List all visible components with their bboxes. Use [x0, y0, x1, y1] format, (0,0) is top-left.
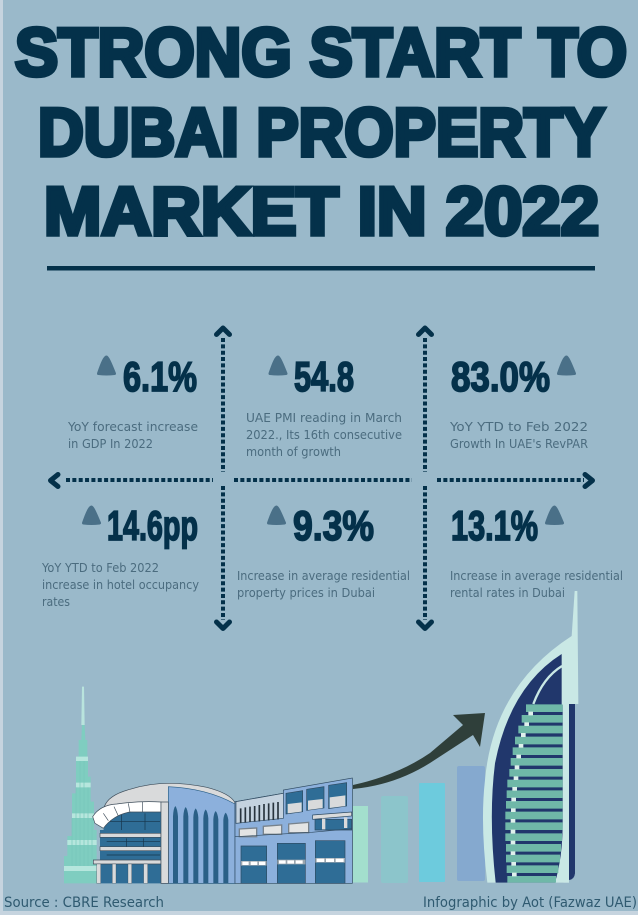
icon: Burj Al Arab — [483, 591, 578, 883]
icon: office building — [235, 778, 352, 883]
icon: up triangle — [558, 357, 574, 374]
icon: mall building — [93, 783, 235, 883]
stat: rental rates: 13.1% — [451, 502, 538, 549]
title: MARKET IN 2022 — [44, 174, 599, 250]
stat: PMI: 2022., Its 16th consecutive — [246, 427, 402, 442]
icon: up triangle — [98, 357, 114, 374]
stat: GDP: in GDP In 2022 — [68, 436, 153, 451]
divider arrows — [50, 328, 592, 628]
icon: up triangle — [546, 507, 562, 524]
icon: Burj Khalifa — [64, 687, 97, 883]
stat: GDP: YoY forecast increase — [67, 419, 198, 434]
stat: PMI: month of growth — [246, 444, 341, 459]
stat: rental rates: rental rates in Dubai — [450, 585, 565, 600]
stat: hotel occupancy: rates — [42, 594, 70, 609]
stat: hotel occupancy — [41, 502, 199, 609]
stat: RevPAR: YoY YTD to Feb 2022 — [449, 419, 588, 434]
stat: hotel occupancy: increase in hotel occupancy — [42, 577, 199, 592]
bar chart — [353, 766, 485, 883]
stat: GDP — [67, 353, 198, 451]
stat: GDP: 6.1% — [123, 353, 197, 400]
stat: rental rates: Increase in average residential — [450, 568, 623, 583]
icon: up triangle — [84, 507, 100, 524]
title: DUBAI PROPERTY — [38, 95, 605, 171]
stat: PMI: UAE PMI reading in March — [246, 410, 402, 425]
stat: property prices: 9.3% — [293, 502, 374, 549]
stat: PMI — [246, 353, 402, 459]
icon: up triangle — [270, 357, 286, 374]
source credit: Source : CBRE Research — [4, 895, 164, 911]
title underline — [47, 266, 595, 270]
title — [15, 15, 627, 250]
stat: RevPAR — [449, 353, 588, 451]
stat: RevPAR: 83.0% — [451, 353, 550, 400]
growth arrow — [353, 713, 485, 789]
stat: PMI: 54.8 — [294, 353, 354, 400]
stat: property prices: property prices in Dubai — [237, 585, 375, 600]
stat: property prices: Increase in average residential — [237, 568, 410, 583]
stat: hotel occupancy: YoY YTD to Feb 2022 — [41, 560, 159, 575]
stat: RevPAR: Growth In UAE's RevPAR — [450, 436, 588, 451]
stat: property prices — [237, 502, 410, 600]
stat: rental rates — [450, 502, 623, 600]
stat: hotel occupancy: 14.6pp — [107, 502, 198, 549]
icon: up triangle — [268, 507, 284, 524]
